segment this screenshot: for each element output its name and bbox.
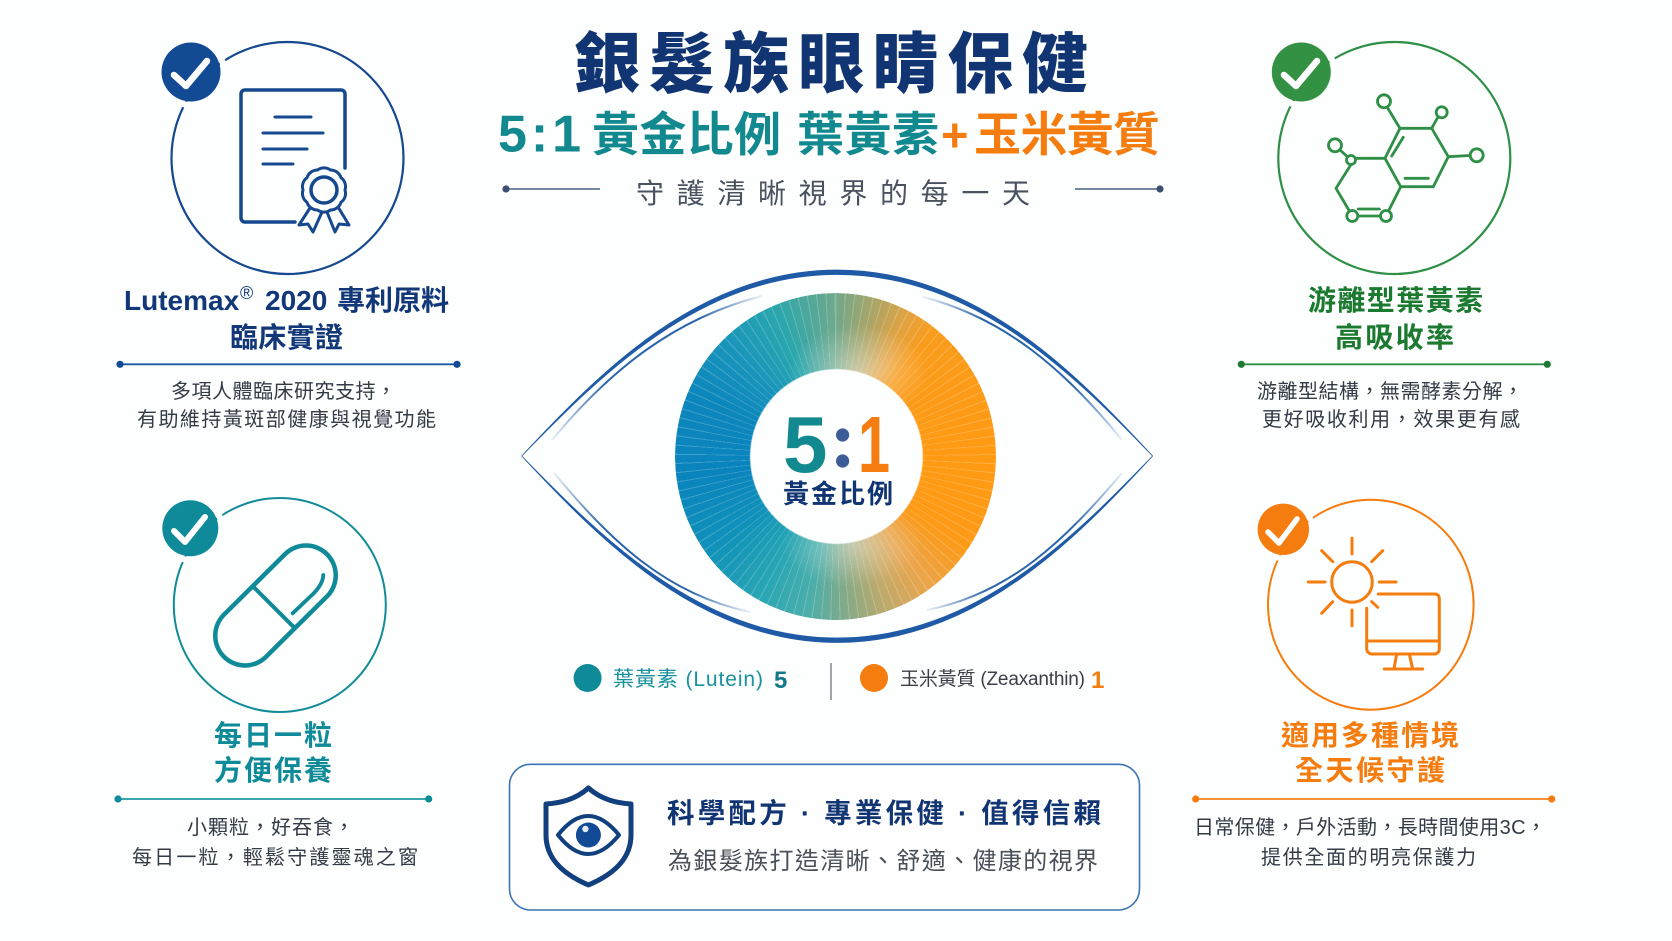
legend: 葉黃素 (Lutein) <box>613 668 763 691</box>
description <box>1194 811 1546 869</box>
iris ring: 5:1 colour gradient <box>675 293 996 620</box>
heading: 游離型葉黃素 <box>1308 285 1483 316</box>
divider <box>116 361 461 368</box>
subtitle: 5:1 golden ratio: 5:1 <box>498 106 581 164</box>
legend: 1 <box>1091 667 1104 694</box>
icon: certificate in ring with check badge <box>158 39 404 274</box>
heading: 方便保養 <box>214 755 332 786</box>
heading: 高吸收率 <box>1335 322 1454 353</box>
panel: one capsule daily <box>114 497 432 870</box>
description: 每日一粒，輕鬆守護靈魂之窗 <box>132 841 418 870</box>
description: 日常保健，戶外活動，長時間使用3C， <box>1194 811 1546 840</box>
heading <box>1308 285 1483 353</box>
eye outline <box>522 270 1153 642</box>
heading: 全天候守護 <box>1295 755 1445 786</box>
subtitle: 5:1 golden ratio: 玉米黃質 <box>974 108 1160 161</box>
description: 有助維持黃斑部健康與視覺功能 <box>137 408 436 431</box>
description: 多項人體臨床研究支持， <box>171 375 396 404</box>
callout: scientific formula: 科學配方 · 專業保健 · 值得信賴 <box>667 798 1102 828</box>
divider <box>1192 795 1555 803</box>
legend: 玉米黃質 (Zeaxanthin) <box>900 668 1085 690</box>
centre ratio: 黃金比例 <box>783 479 893 509</box>
heading: 每日一粒 <box>214 720 332 751</box>
heading <box>214 720 332 786</box>
divider <box>1238 361 1551 368</box>
panel: all-day scenarios <box>1192 500 1555 869</box>
icon: shield with eye <box>546 788 631 885</box>
heading: Lutemax <box>124 285 240 316</box>
tagline with side rules: 守護清晰視界的每一天 <box>636 178 1030 209</box>
divider <box>114 795 432 803</box>
subtitle: 5:1 golden ratio <box>498 106 1160 164</box>
heading: 2020 <box>265 285 327 316</box>
legend: 5 <box>774 667 787 694</box>
description <box>137 375 436 431</box>
description: 更好吸收利用，效果更有感 <box>1262 403 1520 432</box>
heading: ® <box>240 283 253 303</box>
description: 游離型結構，無需酵素分解， <box>1257 375 1523 404</box>
heading: 適用多種情境 <box>1281 720 1459 751</box>
tagline with side rules <box>502 178 1164 209</box>
icon: sun and monitor in ring with check badge <box>1254 500 1474 710</box>
subtitle: 5:1 golden ratio: + <box>941 108 968 161</box>
centre ratio: 5 <box>783 400 828 489</box>
description <box>1257 375 1523 432</box>
description: 小顆粒，好吞食， <box>187 811 354 840</box>
callout: scientific formula <box>510 764 1140 910</box>
chart: eye with 5:1 ratio <box>522 270 1153 642</box>
description: 提供全面的明亮保護力 <box>1261 846 1476 869</box>
main title: 銀髮族眼睛保健 <box>574 27 1088 101</box>
legend <box>574 663 1104 700</box>
callout: scientific formula: 為銀髮族打造清晰、舒適、健康的視界 <box>668 841 1098 876</box>
subtitle: 5:1 golden ratio: 葉黃素 <box>797 108 939 161</box>
centre ratio: 1 <box>858 400 890 489</box>
panel: Lutemax patent: 臨床實證 <box>230 322 343 353</box>
heading <box>1281 720 1459 786</box>
centre ratio <box>783 400 893 509</box>
description <box>132 811 418 870</box>
heading: 專利原料 <box>337 285 449 316</box>
panel: free-form lutein <box>1238 39 1551 432</box>
icon: molecule in ring with check badge <box>1268 39 1510 274</box>
icon: capsule in ring with check badge <box>159 497 386 712</box>
subtitle: 5:1 golden ratio: 黃金比例 <box>592 108 781 161</box>
panel: Lutemax patent <box>116 39 461 431</box>
